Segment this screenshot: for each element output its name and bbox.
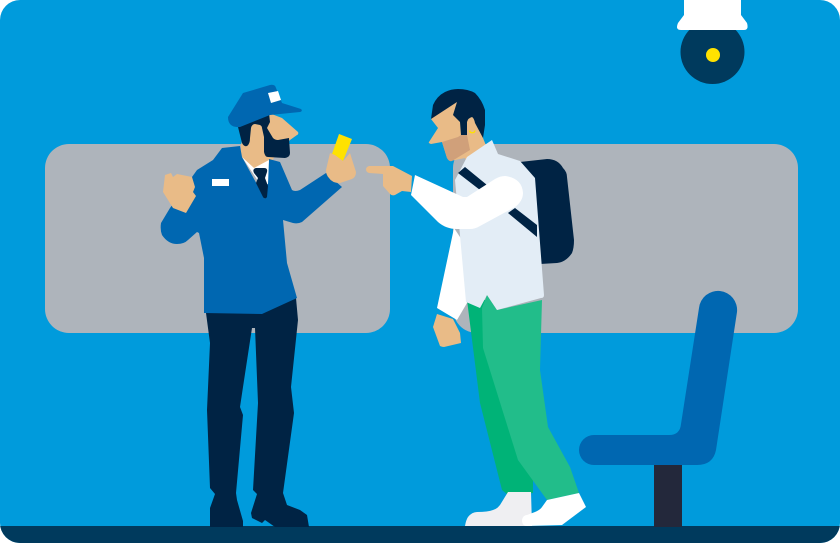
passenger figure <box>366 89 586 526</box>
passenger hair <box>431 89 485 138</box>
guard hair and beard <box>238 113 290 158</box>
passenger shirt <box>455 140 544 310</box>
right window <box>453 144 798 333</box>
earring <box>470 130 475 133</box>
backpack <box>520 159 574 264</box>
passenger rear shoe <box>465 492 532 526</box>
passenger trousers <box>482 295 579 500</box>
bag strap lower <box>508 208 537 237</box>
passenger rear arm <box>437 228 467 320</box>
bag strap upper <box>458 167 487 190</box>
passenger trousers shadow <box>467 300 533 495</box>
passenger front shoe <box>522 493 586 526</box>
left window <box>45 144 390 333</box>
lamp dome <box>680 30 744 84</box>
cap badge <box>268 91 281 103</box>
name tag <box>212 179 229 186</box>
guard face and neck <box>241 113 298 168</box>
floor <box>0 526 840 543</box>
lamp light <box>706 48 720 62</box>
passenger lower hand <box>433 314 461 347</box>
pointing hand <box>366 166 412 195</box>
seat body <box>579 291 737 465</box>
guard shirt collar <box>242 157 269 187</box>
guard cap <box>228 85 302 127</box>
guard fist <box>163 173 196 213</box>
seat <box>579 291 737 527</box>
guard jacket <box>161 146 342 314</box>
guard figure <box>161 85 356 527</box>
passenger face and neck <box>428 102 486 161</box>
lamp mount <box>677 0 748 30</box>
passenger beard <box>442 135 470 161</box>
guard tie <box>253 168 268 198</box>
passenger front arm <box>411 175 523 229</box>
ceiling lamp <box>677 0 748 84</box>
seat post <box>654 465 682 527</box>
guard trousers and boots <box>206 298 309 527</box>
ticket card <box>332 134 352 161</box>
guard hand <box>326 153 356 183</box>
